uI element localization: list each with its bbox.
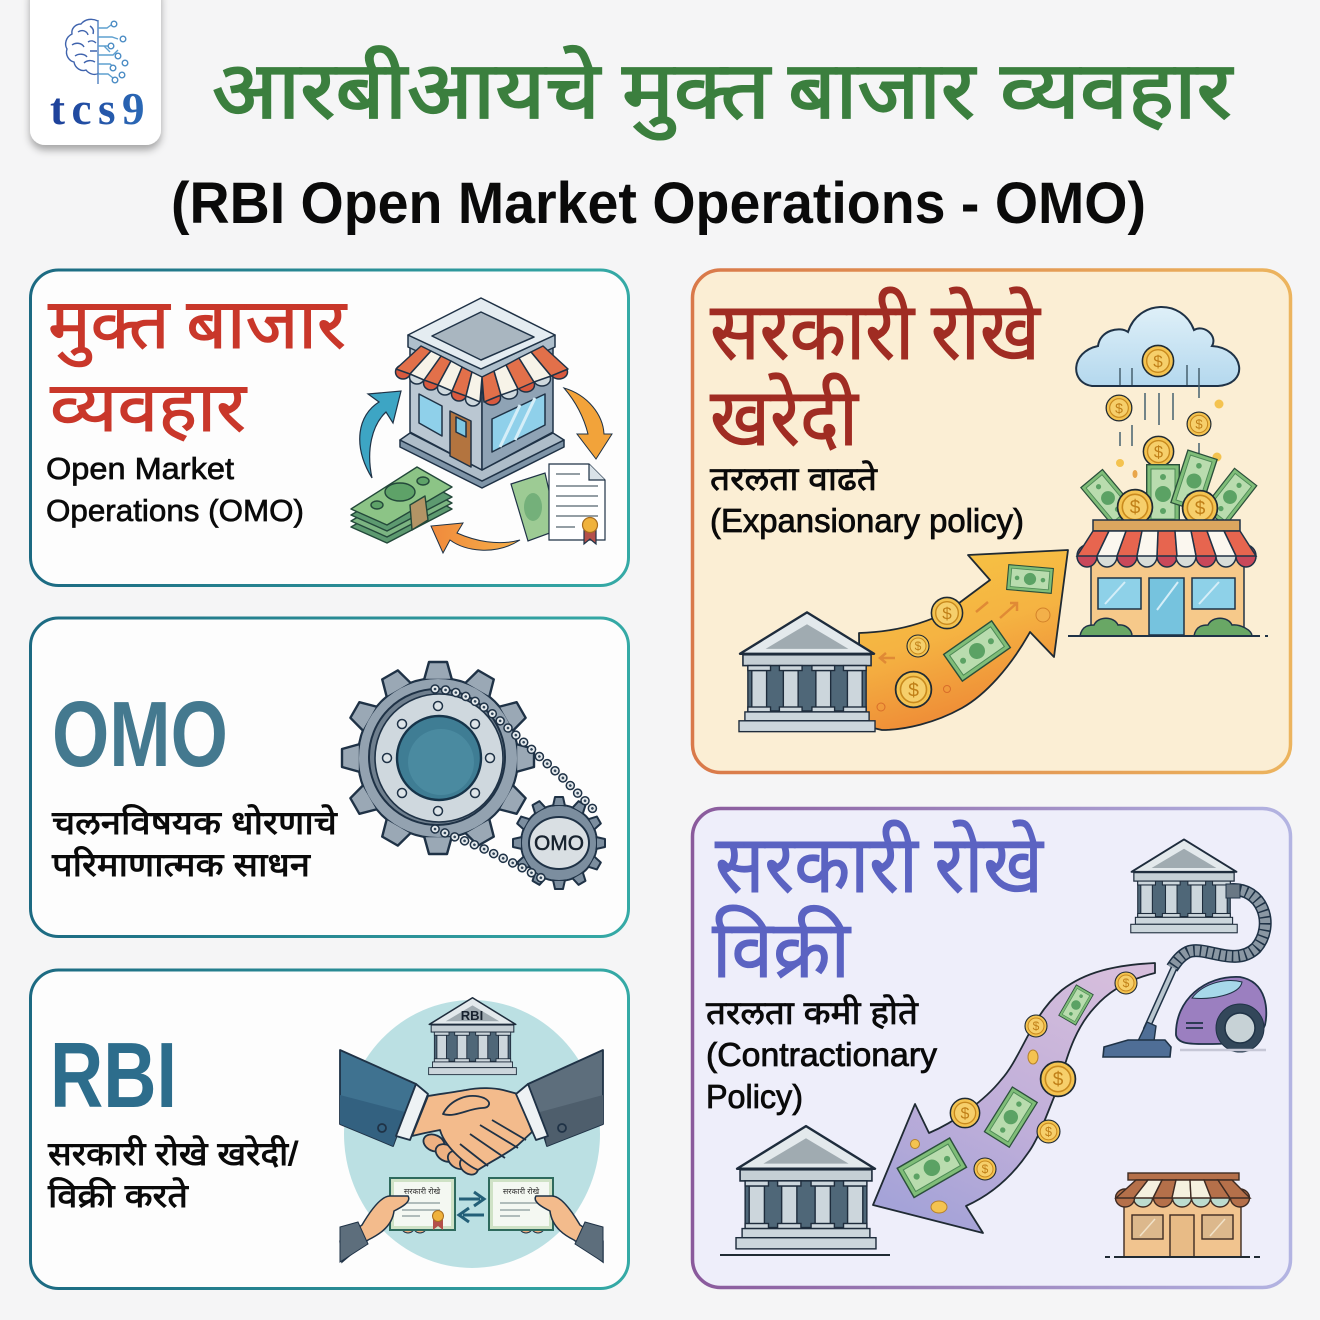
icon: small shop — [1105, 1173, 1260, 1257]
panel: government bond purchase — [692, 270, 1290, 772]
text: liquidity increases: (Expansionary policy) — [710, 502, 1024, 539]
text: open market operations: Operations (OMO) — [46, 493, 304, 528]
icon: central bank — [720, 1126, 890, 1255]
icon: RBI bank — [429, 998, 516, 1075]
text: liquidity decreases — [706, 993, 938, 1115]
heading: mukt bazar: मुक्त बाजार — [48, 285, 347, 368]
arrow: orange left — [431, 523, 520, 553]
logo card — [30, 0, 161, 145]
text: buys and sells bonds — [48, 1134, 299, 1214]
text: quantitative tool: परिमाणात्मक साधन — [52, 846, 311, 883]
icon: bills and coins on arrow — [877, 565, 1053, 711]
heading: RBI: RBI — [50, 1023, 177, 1127]
title: बाजार — [788, 46, 976, 135]
text: liquidity increases: तरलता वाढते — [710, 459, 878, 497]
icon: shop — [1068, 520, 1268, 636]
arrow: liquidity to market — [859, 550, 1068, 730]
title: व्यवहार — [1000, 46, 1233, 135]
text: open market operations — [46, 451, 304, 528]
icon: falling coins — [1106, 345, 1224, 478]
icon: vacuum cleaner — [1103, 890, 1266, 1057]
icon: bills and coins on arrow — [897, 972, 1137, 1213]
icon: large gear — [342, 662, 534, 854]
text: liquidity decreases: तरलता कमी होते — [706, 993, 919, 1031]
title: मुक्त — [622, 46, 772, 140]
panel: government bond sale — [692, 808, 1290, 1288]
icon: fan of money — [1081, 450, 1257, 527]
icon: bond exchange: सरकारी रोखे — [503, 1187, 540, 1196]
panel: OMO — [30, 618, 628, 936]
logo wordmark: tcs9 — [50, 84, 151, 134]
arrow: liquidity drained — [873, 963, 1155, 1233]
icon: RBI bank: RBI — [461, 1008, 483, 1023]
subtitle: (RBI Open Market Operations - OMO) — [171, 171, 1146, 236]
text: liquidity increases — [710, 459, 1024, 539]
background circle — [344, 1000, 600, 1268]
heading: vyavahar: व्यवहार — [50, 368, 247, 446]
icon: small OMO gear — [513, 797, 605, 889]
heading: sarkari rokhe: सरकारी रोखे — [710, 286, 1041, 376]
icon: bank with vacuum hose — [1131, 839, 1240, 933]
panel: RBI — [30, 970, 628, 1288]
icon: bond document — [511, 464, 605, 544]
icon: market shop — [396, 298, 568, 488]
icon: handshake — [340, 1050, 603, 1178]
arrow: orange down — [564, 388, 612, 459]
panel: open market operations — [30, 270, 628, 586]
text: buys and sells bonds: विक्री करते — [48, 1176, 189, 1214]
icon: central bank — [739, 612, 875, 732]
text: quantitative tool: चलनविषयक धोरणाचे — [52, 803, 338, 841]
icon: money stack — [351, 467, 452, 543]
text: quantitative tool — [52, 803, 338, 883]
heading: OMO: OMO — [52, 682, 228, 786]
text: buys and sells bonds: सरकारी रोखे खरेदी/ — [48, 1134, 299, 1172]
heading: sarkari rokhe: सरकारी रोखे — [715, 819, 1044, 909]
heading: kharedi: खरेदी — [710, 372, 859, 462]
icon: cloud — [1076, 307, 1239, 386]
text: liquidity decreases: Policy) — [706, 1078, 803, 1115]
icon: bond exchange: सरकारी रोखे — [404, 1187, 441, 1196]
icon: brain circuit — [66, 19, 128, 84]
heading: vikri: विक्री — [712, 905, 851, 994]
title: आरबीआयचे — [212, 45, 601, 135]
icon: chain — [435, 689, 593, 881]
arrow: blue up — [360, 391, 401, 478]
icon: small OMO gear: OMO — [534, 832, 584, 855]
icon: bond exchange — [340, 1178, 603, 1262]
title — [212, 45, 1233, 140]
text: liquidity decreases: (Contractionary — [706, 1036, 938, 1073]
text: open market operations: Open Market — [46, 451, 234, 486]
